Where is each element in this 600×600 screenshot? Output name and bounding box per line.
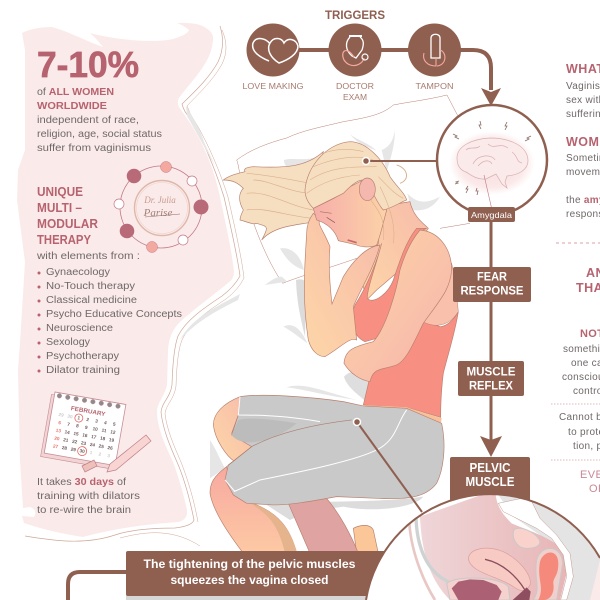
upper arm over torso — [344, 230, 452, 382]
abdominal cavity — [420, 490, 567, 600]
grey shorts — [225, 395, 444, 505]
icon: calendar: 23 — [81, 440, 87, 446]
statistic text block: of ALL WOMEN — [37, 87, 114, 98]
icon: calendar: 3 — [107, 453, 111, 459]
icon: calendar: 25 — [98, 443, 105, 449]
right panel: what is vaginismus — [566, 62, 600, 220]
icon: calendar: 3 — [95, 418, 99, 424]
icon: calendar — [41, 391, 126, 469]
therapy elements list: with elements from : — [36, 251, 140, 262]
connector: head to brain — [366, 160, 440, 162]
icon: calendar: 12 — [110, 429, 116, 435]
box: muscle reflex: REFLEX — [469, 378, 513, 392]
box: pelvic muscle: MUSCLE — [466, 475, 514, 489]
neck and chest — [360, 202, 428, 300]
therapy elements list: Gynaecology — [46, 267, 110, 278]
sacrum band — [495, 490, 600, 600]
facial features — [320, 212, 357, 243]
bed shadows — [210, 130, 440, 520]
marker dot: head — [362, 158, 370, 164]
icon: calendar: 7 — [67, 422, 71, 427]
connector: hip to pelvic circle — [357, 422, 422, 512]
icon: calendar: 8 — [76, 423, 80, 429]
icon: calendar: 4 — [104, 420, 108, 425]
trigger label: doctor exam — [336, 81, 374, 102]
trigger label: tampon: TAMPON — [416, 81, 454, 91]
trigger label: doctor exam: EXAM — [343, 92, 367, 102]
statistic text block: independent of race, — [37, 115, 139, 126]
right panel: and that — [562, 266, 600, 397]
trigger label: doctor exam: DOCTOR — [336, 81, 374, 91]
statistic text block: WORLDWIDE — [37, 101, 107, 112]
divider — [551, 459, 600, 461]
panel: statistics and therapy background — [17, 23, 244, 546]
knee skin — [213, 397, 252, 462]
dilator training text: It takes 30 days of — [37, 477, 126, 488]
dilator training text — [37, 477, 140, 516]
box: pelvic muscle — [450, 457, 530, 502]
ear — [359, 178, 375, 201]
therapy heading: UNIQUE — [37, 185, 83, 199]
right panel: even — [580, 469, 600, 495]
therapy logo ring: Dr. Julia — [143, 195, 176, 205]
icon: calendar: 1 — [89, 450, 93, 455]
uterus — [468, 548, 531, 591]
pocket organ — [513, 528, 540, 548]
pelvic anatomy circle — [366, 490, 600, 600]
therapy elements list: Dilator training — [46, 365, 120, 376]
bladder — [447, 578, 510, 600]
marker dot: hip — [354, 418, 360, 426]
icon: calendar: 5 — [113, 422, 116, 427]
statistic headline: 7-10% — [37, 44, 139, 85]
back skin above top — [420, 263, 458, 325]
icon: calendar: 14 — [64, 429, 71, 435]
icon: calendar: 20 — [54, 436, 60, 442]
callout: tightening: squeezes the vagina closed — [170, 575, 328, 587]
foot — [353, 525, 378, 553]
icon: calendar: 22 — [72, 439, 78, 445]
box: fear response — [453, 267, 531, 302]
therapy elements list: No-Touch therapy — [46, 281, 135, 292]
pelvic background tint — [590, 561, 600, 600]
therapy elements list: Neuroscience — [46, 323, 113, 334]
therapy heading: MODULAR — [37, 217, 98, 231]
icon: calendar: 15 — [73, 431, 79, 437]
icon: calendar: 10 — [92, 426, 99, 432]
vertical flow line — [490, 215, 492, 442]
therapy heading: THERAPY — [37, 233, 92, 247]
divider — [551, 403, 600, 405]
icon: calendar: 27 — [53, 444, 59, 449]
icon: calendar: 16 — [82, 432, 88, 438]
icon: pencil — [82, 435, 151, 472]
vertebrae — [498, 497, 573, 600]
callout: tightening — [126, 551, 388, 596]
trigger: tampon — [408, 24, 461, 76]
icon: calendar: 6 — [58, 420, 62, 426]
flowing hair — [223, 152, 323, 240]
connector: trigger line and arrow — [273, 50, 501, 106]
icon: calendar: 30 — [67, 414, 73, 419]
box: fear response: FEAR — [477, 270, 507, 284]
label: amygdala — [468, 207, 515, 222]
icon: calendar: 24 — [89, 442, 96, 448]
icon: calendar: 19 — [109, 437, 115, 443]
icon: calendar: 29 — [70, 447, 77, 453]
icon: calendar: 30 — [79, 448, 86, 454]
vaginal canal — [513, 587, 531, 600]
icon: calendar: 29 — [58, 412, 65, 418]
icon: calendar: 1 — [77, 415, 81, 421]
back leg — [288, 497, 358, 553]
box: muscle reflex: MUSCLE — [466, 364, 516, 378]
therapy elements list: Sexology — [46, 337, 90, 348]
icon: calendar: 2 — [98, 452, 102, 457]
illustration: woman lying on bed — [210, 95, 470, 553]
therapy heading — [37, 185, 98, 247]
right panel: cannot — [559, 412, 600, 452]
therapy elements list — [36, 251, 182, 376]
therapy logo ring — [114, 162, 208, 252]
heading: triggers: TRIGGERS — [325, 8, 385, 22]
face — [313, 180, 387, 247]
tank top — [352, 228, 458, 417]
waist skin — [363, 405, 442, 425]
box: fear response: RESPONSE — [460, 284, 524, 298]
rectum — [533, 549, 563, 600]
icon: calendar: 18 — [100, 436, 106, 441]
icon: calendar: 13 — [55, 428, 62, 434]
divider — [556, 242, 600, 244]
therapy elements list: Psychotherapy — [46, 351, 119, 362]
icon: calendar: 21 — [63, 437, 69, 443]
dilator training text: training with dilators — [37, 491, 140, 502]
trigger: love making — [246, 24, 300, 76]
front lower leg — [210, 467, 297, 553]
connector: bracket to callout — [68, 572, 130, 600]
icon: calendar: 17 — [91, 434, 97, 440]
abdominal wall band — [416, 517, 448, 582]
icon: nerve sparks — [453, 121, 531, 195]
therapy elements list: Classical medicine — [46, 295, 137, 306]
trigger label: love making: LOVE MAKING — [242, 81, 304, 91]
icon: calendar: 26 — [107, 445, 114, 451]
icon: calendar: FEBRUARY — [70, 406, 106, 418]
label: amygdala: Amygdala — [471, 210, 512, 220]
trigger: doctor exam — [328, 24, 382, 76]
statistic text block — [37, 87, 162, 154]
statistic text block: religion, age, social status — [37, 129, 162, 140]
statistic text block: suffer from vaginismus — [37, 143, 151, 154]
dilator training text: to re-wire the brain — [37, 505, 131, 516]
callout: tightening: The tightening of the pelvic muscles — [144, 559, 356, 571]
therapy heading: MULTI – — [37, 201, 82, 215]
brain circle — [437, 105, 547, 215]
box: muscle reflex — [458, 361, 524, 396]
hair on head — [305, 142, 407, 243]
forearm near head — [304, 213, 380, 357]
icon: calendar: 11 — [101, 428, 107, 434]
icon: calendar: 9 — [85, 425, 88, 430]
shadow below callout — [126, 595, 376, 600]
therapy elements list: Psycho Educative Concepts — [46, 309, 182, 320]
arrow to pelvic muscle — [480, 436, 502, 457]
therapy logo ring: Parise — [143, 207, 172, 219]
icon: calendar: 2 — [86, 417, 90, 422]
box: pelvic muscle: PELVIC — [470, 461, 510, 475]
pillow — [237, 95, 470, 283]
icon: calendar: 28 — [61, 445, 68, 451]
